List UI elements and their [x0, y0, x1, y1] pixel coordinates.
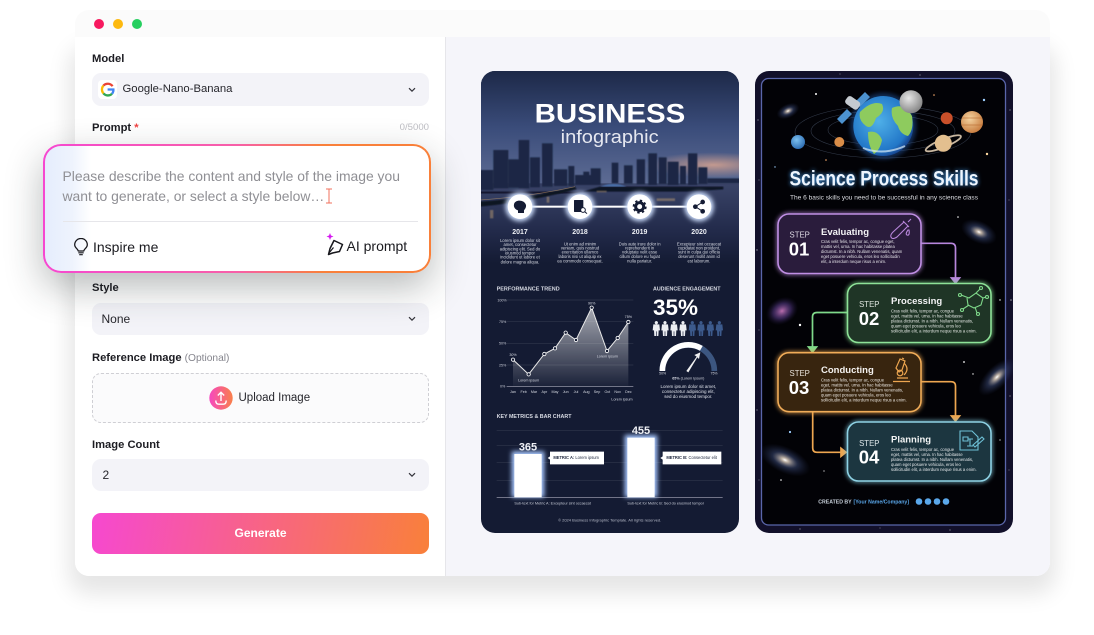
performance trend chart: Jul — [574, 390, 579, 394]
step 01 card: STEP — [790, 230, 810, 240]
icon: microscope — [893, 358, 910, 382]
years and captions: ea commodo consequat. — [557, 258, 603, 263]
performance trend chart: Sep — [594, 390, 600, 394]
performance trend chart: 25% — [499, 363, 507, 367]
years and captions: dolore magna aliqua. — [501, 259, 539, 264]
years and captions: cupidatat non proident, — [678, 246, 720, 251]
step 03 card: quam eget posuere vehicula, eros leo — [821, 392, 892, 398]
performance trend chart: 75% — [625, 315, 633, 319]
key metrics bar chart: KEY METRICS & BAR CHART — [497, 414, 572, 420]
step 04 card: quam eget posuere vehicula, eros leo — [891, 462, 962, 467]
performance trend chart: Nov — [614, 390, 621, 394]
years and captions — [500, 229, 722, 264]
audience engagement: AUDIENCE ENGAGEMENT — [653, 287, 721, 293]
credits footer — [818, 498, 949, 505]
years and captions: cillum dolore eu fugiat — [619, 254, 661, 259]
icon: plan document — [960, 431, 984, 450]
years and captions: 2018 — [572, 229, 588, 236]
audience caption: sed do eiusmod tempor. — [664, 394, 712, 399]
step 03 card: Cras velit felis, tempor ac, congue — [821, 378, 885, 382]
step 01 card: elit, a interdum neque risus a enim. — [821, 259, 886, 264]
prompt label: Prompt * — [92, 122, 139, 134]
style select: None — [102, 312, 130, 326]
step 02 card: sollicitudin elit, a interdum neque risus a enim. — [891, 328, 977, 334]
timeline — [505, 192, 714, 221]
model select: Google-Nano-Banana — [122, 83, 232, 95]
panel: science process skills: Science Process Skills — [790, 168, 978, 191]
performance trend chart: Dec — [625, 390, 632, 394]
step 03 card — [778, 353, 921, 412]
icon: share — [687, 194, 711, 219]
step 02 card — [848, 284, 991, 342]
generate button: Generate — [234, 526, 287, 540]
key metrics bar chart: Sub-text for Metric B: Sed do eiusmod tempor — [627, 502, 705, 506]
generate button — [92, 513, 429, 554]
performance trend chart: 30% — [509, 353, 517, 357]
icon: head — [508, 194, 532, 219]
icon: document search — [568, 194, 592, 219]
city photo — [481, 71, 739, 264]
step 04 card: sollicitudin elit, a interdum neque risus a enim. — [891, 467, 977, 472]
years and captions: reprehenderit in — [625, 246, 655, 251]
performance trend chart: Lorem ipsum — [611, 397, 633, 401]
character counter: 0/5000 — [400, 122, 429, 133]
image count label: Image Count — [92, 438, 160, 450]
audience caption: Lorem ipsum dolor sit amet, — [660, 384, 716, 389]
performance trend chart: Oct — [604, 390, 610, 394]
social icons — [916, 498, 949, 505]
step 03 card: Conducting — [821, 365, 874, 376]
preview panel background — [445, 37, 1050, 576]
performance trend chart: 50% — [499, 342, 507, 346]
placeholder text — [62, 168, 400, 204]
step 02 card: quam eget posuere vehicula, eros leo — [891, 324, 962, 328]
performance trend chart: Lorem ipsum — [518, 378, 539, 382]
key metrics bar chart — [497, 414, 723, 522]
audience engagement: 35% — [653, 295, 698, 320]
step 04 card: eget, mattis vel, urna. In hac habitasse — [891, 452, 963, 457]
app window — [75, 10, 1050, 576]
step 04 card: platea dictumst. In a nibh. Nullam venenatis, — [891, 457, 973, 462]
step 04 card: Planning — [891, 434, 931, 446]
title: Science Process Skills — [790, 168, 978, 191]
years and captions: Lorem ipsum dolor sit — [500, 238, 541, 243]
performance trend chart — [497, 287, 633, 401]
years and captions: Excepteur sint occaecat — [677, 241, 722, 246]
icon: molecule — [958, 286, 988, 316]
step 04 card: Cras velit felis, tempor ac, congue — [891, 447, 955, 452]
step 01 card: mattis vel, urna. In hac habitasse platea — [821, 244, 895, 249]
step 02 card: Processing — [891, 296, 942, 307]
performance trend chart: Jan — [510, 390, 516, 394]
style label: Style — [92, 282, 119, 294]
audience caption — [660, 384, 716, 399]
performance trend chart: Lorem ipsum — [597, 354, 618, 358]
gauge: 75% — [711, 372, 717, 376]
icon: google logo — [98, 80, 117, 99]
performance trend chart: 100% — [497, 298, 507, 302]
placeholder text: Please describe the content and style of the image you — [62, 168, 400, 184]
step 01 card: Evaluating — [821, 227, 869, 238]
icon: satellite — [837, 92, 870, 124]
icon: pen with sparkle — [326, 233, 344, 256]
panel: business infographic — [481, 71, 739, 533]
step 03 card: eget, mattis vel, urna. In hac habitasse — [821, 382, 893, 388]
upload box — [92, 372, 429, 422]
performance trend chart: May — [552, 390, 559, 394]
callout: metric a — [548, 452, 604, 464]
step 01 card: 01 — [789, 238, 809, 260]
years and captions: exercitation ullamco — [562, 250, 599, 255]
connector arrows — [808, 243, 960, 456]
years and captions: amet, consectetur — [503, 242, 537, 247]
callout: metric a: METRIC A: Lorem ipsum — [553, 455, 600, 460]
step 03 card: 03 — [789, 377, 809, 398]
subtitle: The 6 basic skills you need to be successful in any science class — [790, 194, 978, 202]
icon: upload — [209, 386, 233, 410]
step 03 card: STEP — [790, 369, 810, 378]
ai prompt button — [326, 233, 408, 256]
people icons — [653, 321, 723, 336]
window shadow — [75, 40, 1050, 576]
form panel background — [75, 37, 445, 576]
prompt popup card — [43, 144, 431, 273]
step 02 card: 02 — [859, 308, 879, 329]
step 04 card: 04 — [859, 446, 880, 468]
step 03 card: sollicitudin elit, a interdum neque risus a enim. — [821, 398, 907, 402]
model select — [92, 73, 429, 106]
callout: metric b — [660, 452, 721, 464]
key metrics bar chart: 455 — [632, 425, 650, 437]
step 03 card: platea dictumst. In a nibh. Nullam venenatis, — [821, 388, 903, 392]
step 01 card — [778, 214, 921, 274]
step 04 card: STEP — [859, 439, 879, 448]
panel: science process skills — [755, 71, 1022, 533]
footer note: © 2024 Business Infographic Template. All rights reserved. — [558, 517, 661, 522]
performance trend chart: Jun — [563, 390, 569, 394]
audience engagement — [653, 287, 723, 399]
gauge: 65% (Lorem Ipsum) — [672, 376, 704, 380]
years and captions: laboris nisi ut aliquip ex — [559, 254, 602, 259]
placeholder text: want to generate, or select a style below… — [62, 188, 324, 204]
step 02 card: Cras velit felis, tempor ac, congue — [891, 308, 955, 314]
performance trend chart: 90% — [588, 301, 596, 305]
key metrics bar chart: 365 — [519, 441, 537, 453]
upload box: Upload Image — [238, 392, 310, 404]
window controls — [94, 19, 142, 29]
subtitle: infographic — [561, 126, 659, 147]
performance trend chart: Aug — [583, 390, 590, 394]
years and captions: adipiscing elit. Sed do — [500, 246, 541, 251]
credits footer: [Your Name/Company] — [854, 499, 909, 505]
icon: text cursor — [326, 188, 332, 204]
image count select: 2 — [102, 468, 109, 482]
years and captions: nulla pariatur. — [627, 258, 652, 263]
performance trend chart: PERFORMANCE TREND — [497, 287, 560, 293]
icon: chevron — [408, 316, 416, 321]
step 01 card: dictumst. In a nibh. Nullam venenatis, quam — [821, 249, 903, 254]
icon: chevron — [408, 88, 416, 92]
step 01 card: Cras velit felis, tempor ac, congue eget, — [821, 239, 895, 244]
ai prompt button: AI prompt — [346, 238, 407, 254]
icon: gear — [627, 194, 652, 219]
years and captions: sunt in culpa qui officia — [678, 250, 721, 255]
key metrics bar chart: Sub-text for Metric A: Excepteur sint occaecat — [514, 502, 592, 506]
preview illustrations — [481, 71, 1013, 533]
icon: test tube — [891, 219, 911, 238]
performance trend chart: Feb — [521, 390, 527, 394]
years and captions: est laborum. — [688, 258, 710, 263]
gauge: 50% — [659, 372, 666, 376]
divider — [62, 221, 418, 222]
years and captions: deserunt mollit anim id — [678, 254, 720, 259]
gauge — [659, 345, 717, 380]
model label: Model — [92, 52, 124, 64]
years and captions: veniam, quis nostrud — [561, 246, 600, 251]
years and captions: Duis aute irure dolor in — [619, 241, 661, 246]
step 02 card: STEP — [859, 300, 879, 309]
star border texture — [756, 74, 1012, 531]
step 01 card: eget posuere vehicula, eros leo sollicitudin — [821, 254, 900, 259]
deep space decorations — [755, 93, 1022, 483]
performance trend chart: Mar — [531, 390, 538, 394]
performance trend chart: 75% — [499, 320, 507, 324]
years and captions: incididunt ut labore et — [500, 255, 541, 260]
credits footer: CREATED BY — [818, 499, 852, 505]
solar system illustration — [791, 90, 983, 159]
image count select — [92, 459, 429, 491]
performance trend chart: 0% — [500, 385, 506, 389]
audience caption: consectetur adipiscing elit, — [662, 389, 715, 394]
years and captions: 2019 — [632, 229, 648, 236]
years and captions: voluptate velit esse — [622, 250, 658, 255]
years and captions: Ut enim ad minim — [564, 241, 597, 246]
callout: metric b: METRIC B: Consectetur elit — [666, 455, 718, 460]
years and captions: 2017 — [512, 229, 528, 236]
icon: light bulb — [74, 238, 88, 256]
years and captions: eiusmod tempor — [505, 250, 536, 255]
reference image label: Reference Image (Optional) — [92, 352, 229, 364]
performance trend chart: Apr — [541, 390, 548, 394]
inspire me button: Inspire me — [93, 239, 158, 255]
icon: chevron — [408, 472, 416, 477]
step 02 card: eget, mattis vel, urna. In hac habitasse — [891, 314, 963, 318]
title: BUSINESS — [535, 99, 685, 129]
years and captions: 2020 — [691, 229, 707, 236]
step 04 card — [848, 422, 991, 481]
style select — [92, 303, 429, 335]
step 02 card: platea dictumst. In a nibh. Nullam venenatis, — [891, 318, 973, 324]
